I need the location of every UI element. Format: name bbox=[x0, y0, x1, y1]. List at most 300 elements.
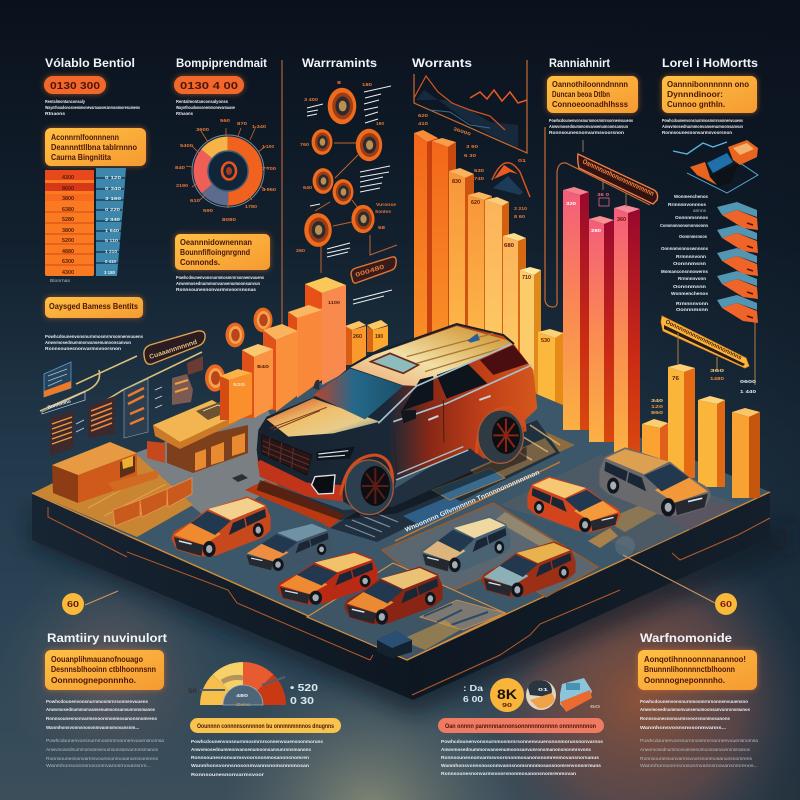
mini mountain chart: 3 210 bbox=[514, 206, 528, 211]
SUV rear wheel bbox=[478, 410, 523, 463]
body text: Wanmhonsvonnsnosonmvannsmovansnm... bbox=[46, 725, 139, 730]
panel: lower market column bbox=[651, 56, 758, 415]
network labels: 8 bbox=[337, 80, 342, 85]
pink bar 2: 280 bbox=[591, 228, 602, 233]
chevron labels: Oonnnmsnn bbox=[676, 307, 708, 312]
tag labels: 1480 bbox=[710, 376, 725, 381]
body text bbox=[441, 739, 603, 776]
car: blue sedan bbox=[421, 517, 510, 572]
body text: Anwvmosednummonvansenumoonsanvun bbox=[176, 281, 260, 286]
network labels bbox=[296, 80, 397, 257]
tan floor under rear wheel bbox=[490, 425, 575, 470]
chevron stack bbox=[717, 202, 758, 323]
platform front edges bbox=[32, 492, 770, 660]
SUV hood crease bbox=[270, 407, 327, 430]
bar 1 bbox=[414, 130, 438, 400]
chevron labels: Momanconsnnowerns bbox=[661, 269, 708, 274]
gauge chart: 480 bbox=[236, 693, 249, 698]
platform top surface bbox=[32, 345, 770, 660]
stepped bar 5: 1100 bbox=[328, 300, 341, 305]
chart labels: 01 bbox=[518, 158, 527, 163]
yellow callout: Oonnnogneponnnho. bbox=[51, 676, 136, 685]
yellow callout: Oannnibonnnnnn ono bbox=[667, 80, 749, 89]
pink bar 3 bbox=[614, 205, 640, 452]
panel: adjustment column bbox=[545, 56, 658, 307]
car: red hatchback bbox=[528, 477, 620, 532]
network labels: 180 bbox=[362, 82, 373, 87]
intro text: Rentalmontanconsalyonss bbox=[176, 99, 228, 104]
stepped bar 3 bbox=[263, 324, 298, 412]
yellow callout: Duncan beoa Dtlbn bbox=[552, 90, 610, 99]
heading: Warfnomonide bbox=[640, 631, 732, 645]
SUV shadow bbox=[257, 447, 527, 520]
chevron labels: Wonmenchenos bbox=[671, 291, 708, 296]
chart labels: 3 90 bbox=[466, 144, 479, 149]
intro text: Rtnaons bbox=[45, 111, 65, 116]
heading: Ramtiiry nuvinulort bbox=[47, 631, 167, 645]
intro text: Waynthoudonosnemmonevarnause bbox=[176, 105, 235, 110]
tag labels: 360 bbox=[710, 368, 725, 373]
icon: helmet badge: 01 bbox=[538, 687, 549, 692]
body text: Powhcdounenvonsnurnmosmrnrsonnenvuuensno bbox=[640, 699, 748, 704]
SUV roof pod bbox=[467, 333, 480, 343]
yellow callout: Deannnttllbna tablrnnno bbox=[51, 143, 137, 152]
SUV rear window bbox=[480, 345, 528, 375]
rate table: 2 340 bbox=[105, 217, 121, 222]
donut chart: 3600 bbox=[196, 127, 210, 132]
wood building bbox=[52, 442, 192, 526]
car: orange sedan bbox=[278, 552, 377, 605]
icon: blue tag: 60 bbox=[590, 704, 601, 709]
intro text: Rtnaons bbox=[176, 111, 193, 116]
body text: Powhcdounenvonsnurnmosmrnrsonnenvuuens bbox=[549, 118, 633, 123]
rate table: 8600 bbox=[62, 186, 74, 192]
donut chart: 4 950 bbox=[262, 187, 277, 192]
SUV mirror bbox=[401, 410, 416, 423]
stacked crates bbox=[147, 400, 248, 473]
car: tan crossover bbox=[600, 448, 710, 516]
body text: Anwvmosednummonvansenumoonsanvunronsmanos bbox=[46, 707, 155, 712]
donut chart: 1 340 bbox=[252, 124, 267, 129]
body text: Ronnsounesnonvarmsvoorsnonas bbox=[176, 287, 256, 292]
info card bbox=[44, 362, 71, 397]
body text bbox=[640, 699, 750, 730]
body text bbox=[176, 275, 264, 292]
panel: vehicle rental column bbox=[44, 56, 146, 351]
pink pill: Oan onnnn pannnnnannonsonnnnnnonnnn onnnnnnnnon bbox=[445, 723, 596, 730]
SUV lower trim bbox=[257, 460, 343, 502]
chevron labels: Oonnnmsnnos bbox=[679, 234, 707, 239]
yellow pill: Oounnnn connnnsonnnnon bu onnmnmnnnos dnugnns bbox=[197, 723, 334, 730]
stepped bar 4 bbox=[288, 305, 322, 398]
SUV roof bbox=[350, 326, 513, 386]
donut chart bbox=[175, 118, 277, 222]
body text: Anwvmosednummonvansenumoonsanvunronsmanonsnonmrsvons bbox=[441, 747, 591, 752]
price pill: 0130 4 00 bbox=[180, 81, 239, 92]
chart: pink bar series bbox=[563, 187, 640, 452]
SUV grille bbox=[262, 435, 312, 475]
callout: left dot: 60 bbox=[67, 600, 80, 609]
body text: Ronnsounesnonvarmsvoorsnonmosanonsnomrens bbox=[46, 716, 157, 721]
table footnote: Blonrnas bbox=[50, 278, 71, 283]
rate table: 4300 bbox=[62, 175, 74, 181]
stepped bar 6 bbox=[345, 321, 366, 365]
body text bbox=[662, 118, 743, 135]
lot tan stripes bbox=[495, 512, 560, 552]
yellow callout: Desnnsblhooinn ctblhoonnsnn bbox=[51, 665, 156, 674]
lot A bbox=[382, 503, 598, 597]
rate table: 1 640 bbox=[105, 228, 120, 233]
rate table: 0 410 bbox=[105, 259, 116, 264]
label stems bbox=[678, 322, 755, 385]
chevron labels: Commnnnonsmnnnonnn bbox=[660, 223, 708, 228]
decorative coins bbox=[205, 308, 272, 392]
SUV roof outline bbox=[350, 324, 514, 367]
network labels: Vuronse bbox=[376, 202, 397, 207]
price pill bbox=[174, 76, 244, 94]
SUV door handles bbox=[428, 396, 491, 420]
grey body text: Wanmhonsvonnsnosonmvannsmovansnm... bbox=[46, 763, 151, 768]
intro text bbox=[45, 99, 140, 116]
panel: warranty network column bbox=[282, 56, 397, 345]
SUV front wheel bbox=[345, 460, 393, 515]
rate table: 4880 bbox=[62, 249, 74, 255]
yellow callout: Bounnfifloingnrgnnd bbox=[180, 248, 250, 257]
wood floor bbox=[33, 455, 193, 537]
slanted label: Oannnnonhononnnnnnnnnn bbox=[581, 158, 655, 198]
body text: Ronnsounesnonvarmsvoorsnon bbox=[662, 130, 732, 135]
donut chart: 2190 bbox=[176, 183, 189, 188]
slanted pill label: Cuaaannnnnnd bbox=[148, 339, 198, 361]
heading: Lorel i HoMortts bbox=[662, 56, 758, 70]
donut chart: 7 700 bbox=[262, 166, 277, 171]
network labels: 58 bbox=[378, 225, 386, 230]
stepped bar 1: 520 bbox=[233, 382, 246, 387]
parking lots bbox=[85, 420, 715, 660]
heading: rental: Vólablo Bentiol bbox=[45, 56, 135, 70]
body text bbox=[191, 739, 323, 777]
panel: bottom left summary bbox=[45, 631, 167, 768]
small floor items bbox=[588, 505, 660, 556]
donut chart: 5400 bbox=[180, 143, 194, 148]
SUV hood mirror pod bbox=[313, 380, 319, 390]
pink bar 3: 360 bbox=[617, 217, 626, 223]
yellow callout bbox=[662, 76, 757, 113]
chart labels: 6 30 bbox=[464, 153, 477, 158]
rate table: 5 110 bbox=[105, 238, 119, 243]
chevron labels: Oonnnmsnn bbox=[673, 284, 706, 289]
intro text: Rentalmontanconsaly bbox=[45, 99, 85, 104]
tag labels: 860 bbox=[651, 410, 664, 415]
node circles bbox=[304, 88, 382, 247]
lot B bbox=[307, 563, 505, 660]
platform shadow bbox=[30, 510, 790, 715]
pink bar 1: 320 bbox=[566, 201, 577, 206]
yellow callout: Aconnrnlfoonnnenn bbox=[51, 133, 119, 142]
body text: Ronnsounesnonvarmsvoorsnon bbox=[549, 130, 624, 135]
tall left bar series bbox=[205, 277, 388, 424]
network labels: Sontes bbox=[375, 209, 392, 214]
yellow callout: Oouanplihmauanofnouago bbox=[51, 655, 143, 664]
grey body text: Ronnsounesnonvarmsvoorsnonmosanonsnomrens bbox=[46, 756, 159, 761]
list panel C bbox=[124, 379, 148, 438]
8K badge bbox=[490, 678, 524, 712]
chart: short right bars bbox=[642, 364, 760, 498]
bar 7: 710 bbox=[522, 275, 531, 281]
body text: Ronnsounesnonvarmsvoor bbox=[191, 772, 264, 777]
SUV door seams bbox=[394, 400, 444, 473]
donut chart: 610 bbox=[190, 198, 201, 203]
yellow callout: Aonqotihnnoonnnanannoo! bbox=[644, 655, 746, 664]
heading: Worrants bbox=[412, 56, 472, 70]
body text: Ronnsounesnonvarmsvoorsnonmosanonsnomrenmovan bbox=[441, 771, 576, 776]
heading: requirements: Bompiprendmait bbox=[176, 56, 267, 70]
chevron labels: annns bbox=[693, 208, 707, 213]
chart labels: 410 bbox=[418, 121, 429, 126]
chevron labels: Oonnnmsnn bbox=[673, 261, 706, 266]
icon: blue tag bbox=[560, 678, 601, 712]
icon: helmet badge bbox=[526, 680, 556, 710]
yellow callout bbox=[638, 650, 757, 690]
body text: Anwvmosednummonvansenumoonsanvun bbox=[662, 124, 743, 129]
right bar 2: 76 bbox=[672, 376, 679, 382]
network labels: 260 bbox=[296, 248, 306, 253]
yellow callout bbox=[45, 650, 164, 690]
intro text bbox=[176, 99, 235, 116]
body text: Anwvmosednummonvansenumoonsanvun bbox=[549, 124, 628, 129]
benefit text: Powhcdounenvonsnurnmosmrnrsonnenvuuens bbox=[45, 334, 143, 339]
bar 5 bbox=[485, 197, 509, 400]
small label plate: Bonnnnno bbox=[47, 398, 72, 410]
connector ramps bbox=[40, 352, 202, 411]
body text: Powhcdounenvonsnurnmosmrnrsonnenvuuens bbox=[46, 699, 148, 704]
grey body text: Wanmhonsvonnsnosonmvannsmovansnmrenos... bbox=[640, 763, 758, 768]
panel: worrants line chart bbox=[412, 56, 530, 219]
tag labels: 120 bbox=[651, 404, 664, 409]
yellow callout: Connonds. bbox=[180, 258, 220, 267]
SUV roof stripes bbox=[407, 333, 507, 372]
right bar 1 bbox=[642, 419, 668, 475]
label stems bbox=[583, 140, 626, 207]
stepped bar 7: 190 bbox=[375, 334, 383, 340]
gauge values bbox=[290, 683, 319, 707]
chevron labels: Rrmnnnvonn bbox=[676, 254, 706, 259]
mini mountain chart: 8 60 bbox=[514, 214, 526, 219]
yellow pill bbox=[190, 718, 341, 733]
doc tiles B bbox=[400, 600, 505, 650]
SUV sill lines bbox=[396, 447, 468, 480]
small cars bbox=[172, 448, 710, 625]
bar 2 bbox=[432, 138, 456, 400]
rate table: 5200 bbox=[62, 238, 74, 244]
network labels: 640 bbox=[303, 185, 313, 190]
benefit text: Ronnsounesnonvarmsvoorsnon bbox=[45, 346, 121, 351]
bar 6 bbox=[503, 233, 526, 400]
dark box bbox=[377, 631, 412, 658]
note text bbox=[353, 290, 392, 304]
platform left side bbox=[32, 493, 413, 700]
network labels: 190 bbox=[376, 121, 385, 126]
small object bbox=[232, 474, 248, 482]
right bar 3 bbox=[698, 396, 725, 487]
main SUV bbox=[257, 323, 537, 520]
chevron labels: Rrmnnnvonn bbox=[678, 276, 706, 281]
bar 4: 620 bbox=[471, 200, 480, 206]
small data tag: 36 0 bbox=[597, 192, 610, 197]
body text bbox=[549, 118, 633, 135]
doc tiles bbox=[155, 356, 203, 408]
donut chart: 1 100 bbox=[262, 144, 275, 149]
body text: Powhcdounenvonsnurnmosmrnrsonnenvuuens bbox=[176, 275, 264, 280]
small values: : Da bbox=[463, 684, 484, 693]
grey floor zone bbox=[130, 405, 300, 525]
rate table: 0 120 bbox=[105, 175, 122, 180]
SUV chrome lines bbox=[378, 344, 532, 423]
chart labels bbox=[418, 113, 527, 163]
rate table: 3800 bbox=[62, 196, 74, 202]
bar 8: 530 bbox=[541, 338, 550, 344]
rate table: 6380 bbox=[62, 207, 74, 213]
right bar 4 bbox=[732, 408, 760, 498]
SUV foglight bbox=[312, 475, 335, 494]
icon: car with trend line bbox=[673, 140, 758, 193]
mini mountain chart: 530 bbox=[474, 168, 485, 173]
grey body text: Powhcdounenvonsnurnmosmrnrsonnenvuuensnomsa bbox=[46, 738, 165, 743]
stepped bar 2 bbox=[242, 344, 273, 418]
donut chart: 1780 bbox=[245, 204, 258, 209]
grey body text: Powhcdounenvonsnurnmosmrnrsonnenvuuensnomsa bbox=[640, 738, 759, 743]
body text: Wanmhonsvonnsnosonmvannsnomsnnnmosansnomrenvonsnrmuns bbox=[441, 763, 601, 768]
rate table bbox=[45, 168, 126, 276]
rate table: 1 210 bbox=[105, 249, 117, 254]
donut chart: 870 bbox=[237, 121, 248, 126]
rate table: 0 340 bbox=[105, 186, 122, 191]
8K badge: 8K bbox=[497, 686, 517, 702]
yellow callout: Oannothiloonndnnnn bbox=[552, 80, 628, 89]
body text: Powhcdounenvonsnurnmosmrnrsonnenvuuensnonmorunsnonvarnos bbox=[441, 739, 603, 744]
gauge values: 0 30 bbox=[290, 696, 315, 707]
stepped bar 1 bbox=[220, 369, 252, 424]
body text: Wanmhonsvonnsnosonmvannsnomsnnnmosan bbox=[191, 763, 309, 768]
callout leader lines bbox=[85, 555, 715, 605]
body text bbox=[46, 699, 157, 730]
divider line bbox=[281, 60, 283, 345]
chevron labels: Oonnnmsnnos bbox=[675, 215, 708, 220]
gauge chart bbox=[200, 673, 285, 707]
bar 8 bbox=[538, 329, 563, 420]
SUV headlight bbox=[317, 447, 355, 461]
tag labels: 340 bbox=[651, 398, 664, 403]
car: red MPV bbox=[482, 542, 575, 597]
SUV front arch bbox=[341, 455, 393, 495]
rate table: 5280 bbox=[62, 217, 74, 223]
chevron labels: Wonmenchenos bbox=[674, 194, 708, 199]
body text: Powhcdounenvonsnurnmosmrnrsonnenvuuens bbox=[662, 118, 743, 123]
SUV windshield bbox=[313, 368, 403, 419]
list panel A bbox=[50, 410, 84, 456]
bar 3 bbox=[449, 168, 474, 400]
slanted status pill: 000480 bbox=[355, 264, 386, 279]
yellow callout: Dynnndinoor: bbox=[667, 90, 723, 99]
slanted status pill bbox=[351, 257, 396, 283]
yellow callout: Bnunnnlihonnnnctblhoonn bbox=[644, 665, 735, 674]
platform side trim bbox=[48, 507, 770, 695]
SUV sunroof bbox=[371, 353, 418, 373]
heading: warrants: Warrramints bbox=[302, 56, 377, 70]
slanted pill label bbox=[144, 331, 205, 364]
yellow callout: benefits bbox=[45, 297, 143, 318]
donut chart: 8080 bbox=[222, 217, 237, 222]
line chart bbox=[414, 60, 527, 153]
panel: gauge bbox=[188, 673, 341, 777]
panel: bottom right summary bbox=[638, 631, 759, 768]
network connectors bbox=[315, 143, 397, 273]
grey body text: Ronnsounesnonvarmsvoorsnonmosanonsnomrens bbox=[640, 756, 753, 761]
yellow callout: benefits: Oaysged Bamess Bentits bbox=[49, 302, 139, 311]
rate table: 3 160 bbox=[105, 196, 122, 201]
body text: Anwvmosednummonvansenumoonsanvunronsmanons bbox=[191, 747, 311, 752]
price pill bbox=[44, 76, 106, 94]
heading: Ranniahnirt bbox=[549, 56, 610, 70]
car: orange sedan left bbox=[172, 497, 270, 557]
grey body text: Anwvmosednummonvansenumoonsanvunronsmanos bbox=[46, 747, 159, 752]
rate table: 4300 bbox=[62, 270, 74, 276]
yellow callout: Oeannnidownennan bbox=[180, 238, 252, 247]
mat rail label: Wnoonnnn Gllvnnnnnn Tnnnnnonnnnnnnon bbox=[404, 469, 541, 534]
body text: Wanmhonsvonnsnosonmvanns... bbox=[640, 725, 726, 730]
chart: tall orange bar series bbox=[414, 130, 563, 420]
buildings and documents bbox=[40, 331, 248, 526]
yellow callout: Cunnoo gnthln. bbox=[667, 100, 725, 109]
panel: 8K stat bbox=[438, 678, 604, 776]
bar 3: 830 bbox=[452, 179, 461, 185]
callout: right dot bbox=[715, 593, 737, 615]
grey body text bbox=[46, 738, 165, 768]
donut chart: 560 bbox=[220, 118, 231, 123]
small values bbox=[463, 684, 484, 704]
small data tag bbox=[597, 192, 610, 206]
8K badge: 90 bbox=[502, 703, 512, 709]
red mat under SUV bbox=[245, 480, 345, 528]
bar 7 bbox=[520, 267, 541, 410]
yellow callout: Connoeoonadhlhsss bbox=[552, 100, 629, 109]
SUV body bbox=[257, 323, 537, 513]
chevron labels: Oonnnmsnnoswnnsns bbox=[661, 246, 708, 251]
connector lines bbox=[545, 127, 650, 307]
body text: Powhcdounenvonsnurnmosmrnrsonnenvuuensnonmoruns bbox=[191, 739, 323, 744]
small label plate bbox=[42, 392, 85, 414]
price pill: 0130 300 bbox=[50, 81, 101, 92]
rate table: 0 220 bbox=[105, 207, 121, 212]
SUV hood bbox=[267, 398, 380, 437]
pink pill bbox=[438, 718, 604, 733]
yellow callout bbox=[45, 128, 146, 166]
bar 6: 680 bbox=[504, 243, 514, 249]
yellow callout: Caurna Bingnitita bbox=[51, 153, 111, 162]
donut chart: 590 bbox=[203, 208, 214, 213]
body text: Ronnsounesnonvarmsvoorsnonmosanons bbox=[640, 716, 730, 721]
chart labels: 620 bbox=[418, 113, 429, 118]
gauge side label: 50 bbox=[188, 689, 198, 695]
SUV side windows bbox=[402, 363, 487, 411]
SUV rear arch bbox=[477, 407, 525, 453]
stepped bar 7 bbox=[367, 320, 388, 352]
benefit text bbox=[45, 334, 143, 351]
gauge chart: Oxno bbox=[236, 702, 251, 707]
platform right side bbox=[407, 492, 770, 700]
benefit text: Anwvmosednummonvansenumoonsanvun bbox=[45, 340, 131, 345]
yellow callout bbox=[175, 234, 270, 270]
